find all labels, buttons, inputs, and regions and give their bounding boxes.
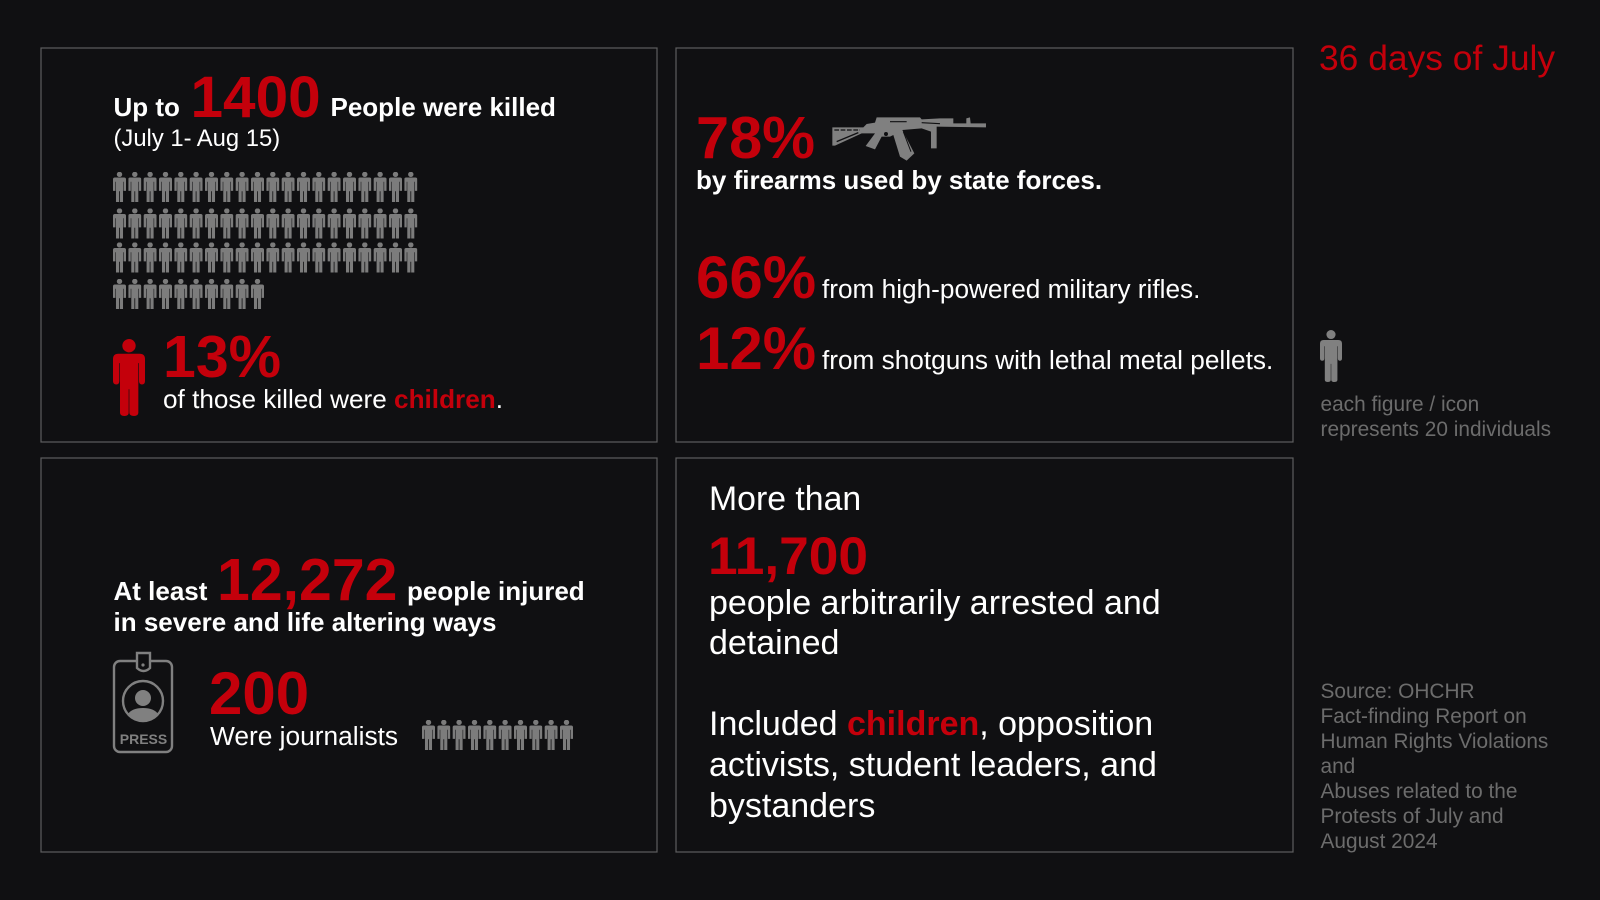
icon: red child figure (113, 339, 145, 416)
heading: up to 1400 people were killed: (July 1- Aug 15) (114, 125, 280, 152)
stat: 11,700: 11,700 (708, 527, 868, 586)
heading: at least 12,272 injured: 12,272 (217, 547, 397, 613)
text: arrested and detained: detained (709, 624, 839, 662)
stat: 12 percent (696, 315, 1273, 382)
icon: press badge: PRESS (120, 731, 167, 747)
stat: 12 percent: 12% (696, 315, 816, 382)
source note: Fact-finding Report on (1320, 705, 1527, 728)
text: more than: More than (709, 480, 861, 518)
heading: at least 12,272 injured (114, 547, 585, 637)
legend text: represents 20 individuals (1320, 418, 1551, 441)
legend text (1320, 393, 1551, 441)
stat: 13 percent children: of those killed were children. (163, 384, 503, 414)
text: included children: Included children, opposition (709, 705, 1153, 743)
heading: up to 1400 people were killed: 1400 (190, 65, 321, 130)
heading: up to 1400 people were killed: Up to (114, 92, 180, 122)
heading: up to 1400 people were killed (114, 65, 556, 152)
text: by firearms used by state forces: by firearms used by state forces. (696, 165, 1102, 195)
title: 36 days of July (1319, 38, 1555, 78)
source note: Abuses related to the (1320, 780, 1518, 803)
stat: 66 percent: from high-powered military rifles. (822, 274, 1200, 304)
stat: 13 percent children: 13% (163, 324, 281, 390)
pictogram: 70 grey figures (113, 172, 417, 309)
stat: 200 journalists: Were journalists (210, 721, 398, 751)
source note: and (1320, 755, 1355, 778)
text: included children (709, 705, 1157, 825)
source note: Protests of July and (1320, 805, 1504, 828)
source note: Human Rights Violations (1320, 730, 1548, 753)
heading: at least 12,272 injured: people injured (407, 576, 585, 606)
panel: injured and journalists (41, 458, 657, 852)
heading: at least 12,272 injured: in severe and life altering ways (114, 607, 496, 637)
text: arrested and detained (709, 584, 1161, 662)
icon: press badge (114, 653, 172, 752)
stat: 13 percent children (163, 324, 503, 414)
heading: at least 12,272 injured: At least (114, 576, 208, 606)
text: arrested and detained: people arbitrarily arrested and (709, 584, 1161, 622)
text: included children: activists, student leaders, and (709, 746, 1157, 784)
source note: August 2024 (1320, 830, 1438, 853)
stat: 200 journalists (209, 660, 398, 751)
legend text: each figure / icon (1320, 393, 1479, 416)
panel: arrests (676, 458, 1293, 852)
heading: up to 1400 people were killed: People were killed (330, 92, 556, 122)
stat: 66 percent (696, 244, 1200, 311)
source note (1320, 680, 1548, 853)
source note: Source: OHCHR (1320, 680, 1475, 703)
panel: firearms (676, 48, 1293, 442)
text: included children: bystanders (709, 787, 875, 825)
panel: people killed (41, 48, 657, 442)
legend (1320, 330, 1551, 441)
icon: legend figure (1320, 330, 1342, 382)
icon: assault rifle (832, 117, 986, 161)
stat: 78 percent: 78% (696, 104, 815, 171)
stat: 12 percent: from shotguns with lethal metal pellets. (822, 345, 1273, 375)
pictogram: 10 grey figures (422, 720, 573, 750)
stat: 66 percent: 66% (696, 244, 816, 311)
stat: 200 journalists: 200 (209, 660, 309, 727)
